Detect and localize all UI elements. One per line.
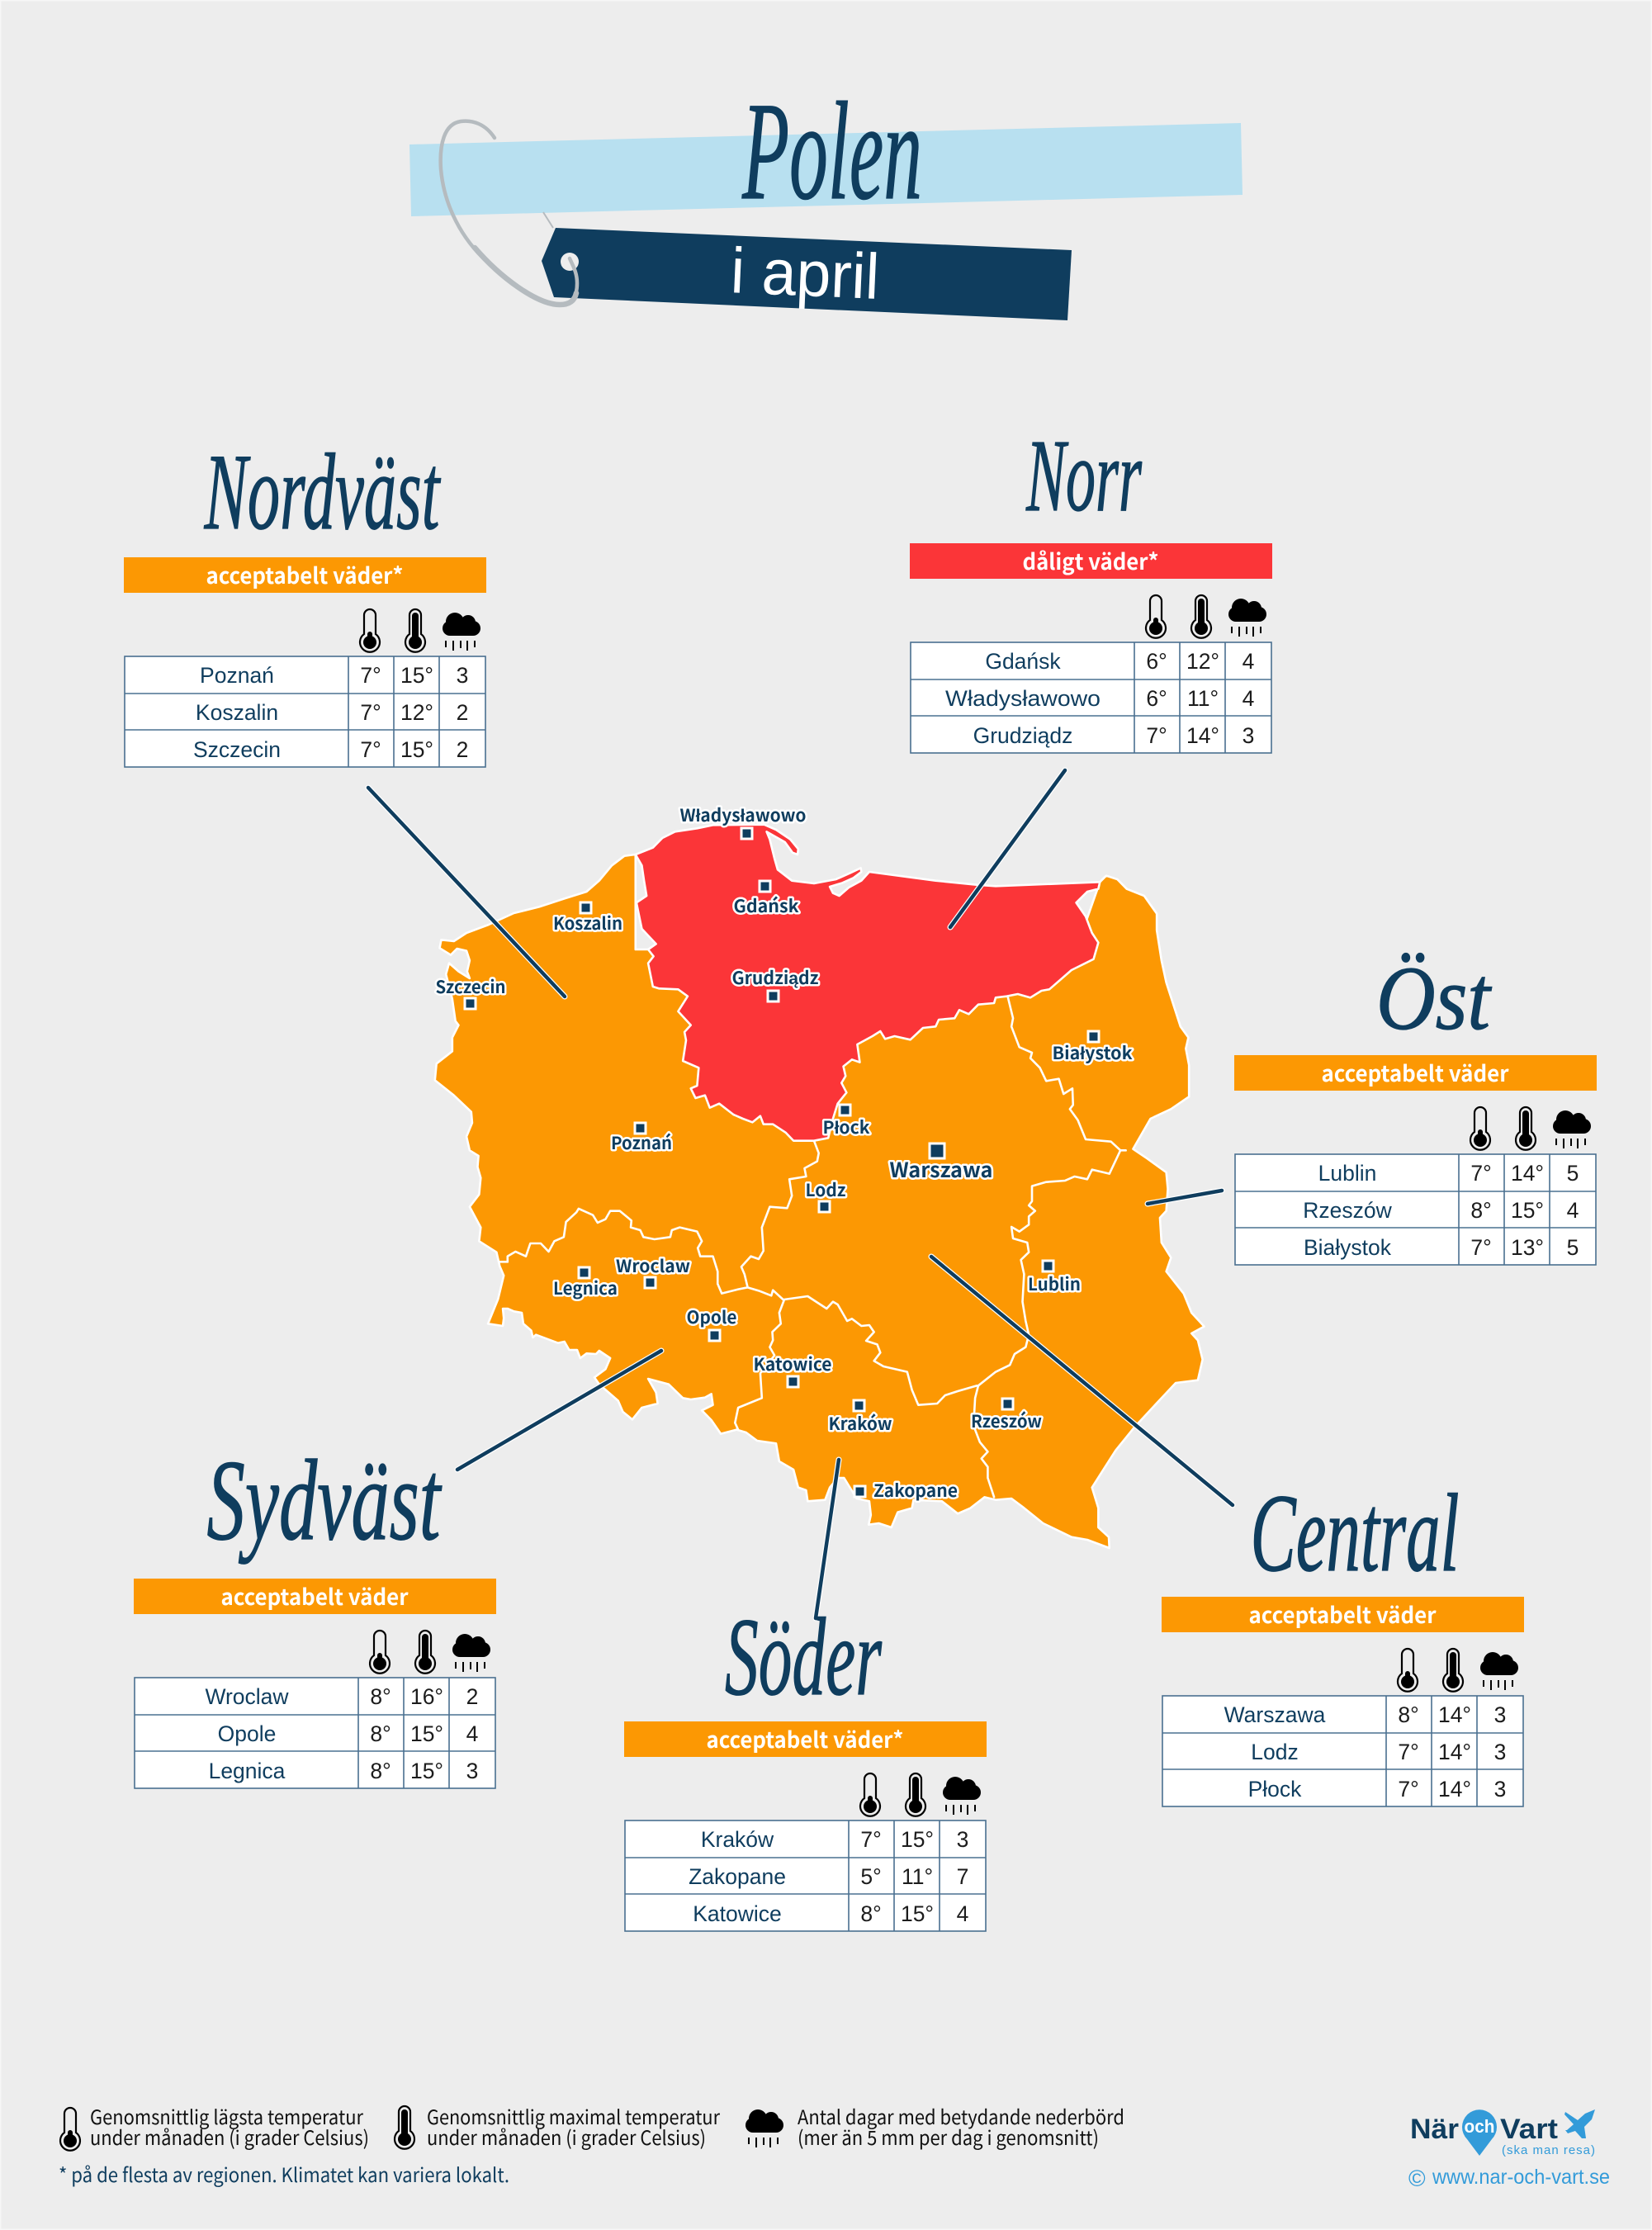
city labels: Grudziądz (731, 965, 819, 990)
panel: Norr (910, 419, 1272, 753)
panel: Sydväst (134, 1437, 496, 1788)
footnote: * på de flesta av regionen. Klimatet kan variera lokalt. (59, 2159, 509, 2188)
table (625, 1820, 986, 1931)
status bar: acceptabelt väder (1321, 1056, 1509, 1088)
table: 7° (1146, 723, 1167, 748)
logo: När (1410, 2114, 1459, 2145)
logo: (ska man resa) (1502, 2143, 1595, 2157)
table: Warszawa (1224, 1702, 1326, 1727)
heading: Öst: Öst (1376, 948, 1492, 1049)
status bar: acceptabelt väder (221, 1579, 409, 1612)
table: Płock (1248, 1777, 1302, 1802)
table: 12° (400, 700, 433, 725)
city labels: Katowice (753, 1352, 832, 1376)
table: Gdańsk (985, 649, 1061, 674)
table: Lublin (1318, 1161, 1376, 1186)
table: 3 (466, 1759, 478, 1783)
table: 7° (360, 737, 381, 762)
logo: www.nar-och-vart.se (1432, 2166, 1610, 2189)
table: 15° (410, 1759, 443, 1783)
table: Władysławowo (945, 686, 1101, 711)
table: 8° (1470, 1198, 1492, 1223)
subtitle text: i april (729, 234, 881, 313)
icon: airplane (1564, 2109, 1595, 2138)
table: Kraków (701, 1827, 774, 1852)
map of Poland (435, 803, 1205, 1548)
table: 4 (1243, 649, 1254, 674)
status bar (134, 1579, 496, 1614)
legend: minimum temperature (60, 2101, 369, 2151)
table: 15° (410, 1721, 443, 1746)
legend: minimum temperature: Genomsnittlig lägsta temperatur (90, 2101, 364, 2130)
region borders (499, 997, 1126, 1497)
city labels: Poznań (611, 1130, 672, 1155)
legend: rain days (746, 2101, 1124, 2151)
table: 4 (1243, 686, 1254, 711)
table: 14° (1438, 1740, 1471, 1764)
city labels: Legnica (553, 1276, 618, 1300)
city labels: Płock (822, 1115, 870, 1139)
city labels: Koszalin (553, 911, 622, 935)
table (125, 656, 485, 767)
icon: map pin (1462, 2109, 1497, 2156)
heading: Central: Central (1250, 1472, 1460, 1595)
table: 3 (1494, 1702, 1506, 1727)
table: 14° (1438, 1777, 1471, 1802)
icons (860, 1773, 981, 1816)
table: 7 (957, 1864, 968, 1889)
legend: rain days: Antal dagar med betydande nederbörd (798, 2101, 1124, 2130)
table: 3 (457, 663, 468, 688)
table: 8° (1398, 1702, 1419, 1727)
table: Wroclaw (205, 1684, 289, 1709)
table: Szczecin (193, 737, 281, 762)
subtitle tag (542, 228, 1072, 320)
table: 6° (1146, 649, 1167, 674)
city labels: Władysławowo (680, 803, 806, 827)
table: 4 (466, 1721, 478, 1746)
status bar (910, 543, 1272, 579)
table: Zakopane (689, 1864, 786, 1889)
panel: Söder (624, 1596, 987, 1931)
table: 8° (370, 1759, 391, 1783)
panel: Central (1162, 1472, 1524, 1806)
table: 3 (1494, 1740, 1506, 1764)
table: 13° (1511, 1235, 1544, 1260)
panel: Nordväst (124, 431, 486, 767)
legend (60, 2101, 1124, 2151)
status bar: dåligt väder* (1022, 544, 1159, 576)
table: 6° (1146, 686, 1167, 711)
table: 3 (957, 1827, 968, 1852)
table: Opole (218, 1721, 276, 1746)
heading: Söder: Söder (725, 1596, 882, 1719)
title: Polen: Polen (741, 73, 922, 229)
table (911, 642, 1271, 753)
tag string loop (441, 121, 577, 305)
table: 5 (1567, 1161, 1579, 1186)
icons (370, 1631, 490, 1674)
logo: © (1408, 2166, 1426, 2191)
table: 4 (957, 1901, 968, 1926)
logo: Vart (1500, 2114, 1558, 2145)
legend: maximum temperature (395, 2101, 721, 2151)
table (1235, 1154, 1596, 1265)
table (1162, 1696, 1523, 1806)
city labels: Warszawa (890, 1154, 992, 1184)
table: 8° (370, 1721, 391, 1746)
leader lines (368, 770, 1233, 1618)
table: 3 (1243, 723, 1254, 748)
table: 7° (1398, 1777, 1419, 1802)
table: 4 (1567, 1198, 1579, 1223)
table: 15° (400, 663, 433, 688)
table: Legnica (209, 1759, 286, 1783)
city labels: Opole (687, 1304, 736, 1329)
legend: maximum temperature: Genomsnittlig maximal temperatur (427, 2101, 721, 2130)
country outline: orange regions (435, 855, 1205, 1548)
region: Norr (red) (636, 825, 1100, 1141)
table: 7° (860, 1827, 882, 1852)
city labels: Zakopane (873, 1478, 958, 1503)
table: Lodz (1251, 1740, 1299, 1764)
table: 2 (457, 737, 468, 762)
city labels: Gdańsk (733, 893, 799, 918)
title band (409, 73, 1243, 229)
icons (1398, 1649, 1518, 1692)
icons (360, 609, 480, 652)
city labels: Lublin (1028, 1271, 1081, 1296)
heading: Nordväst: Nordväst (204, 431, 441, 552)
table: 15° (1511, 1198, 1544, 1223)
table (135, 1678, 495, 1788)
status bar (624, 1721, 987, 1757)
heading: Sydväst: Sydväst (206, 1437, 443, 1565)
table: Grudziądz (973, 723, 1072, 748)
table: 15° (400, 737, 433, 762)
table: 8° (370, 1684, 391, 1709)
table: 2 (457, 700, 468, 725)
city labels: Lodz (806, 1177, 846, 1202)
legend: rain days: (mer än 5 mm per dag i genomsnitt) (798, 2122, 1099, 2151)
table: 7° (360, 700, 381, 725)
city markers (465, 828, 1099, 1497)
status bar (124, 557, 486, 593)
table: Poznań (200, 663, 274, 688)
icons (1470, 1107, 1591, 1150)
table: 14° (1186, 723, 1219, 748)
table: 7° (360, 663, 381, 688)
table: 14° (1438, 1702, 1471, 1727)
logo: och (1465, 2116, 1494, 2137)
table: 15° (901, 1827, 934, 1852)
table: 11° (1187, 686, 1219, 711)
table: 5 (1567, 1235, 1579, 1260)
table: Katowice (693, 1901, 782, 1926)
heading: Norr: Norr (1025, 419, 1143, 533)
status bar (1234, 1055, 1597, 1091)
city labels: Białystok (1052, 1040, 1133, 1065)
table: 11° (902, 1864, 933, 1889)
table: 5° (860, 1864, 882, 1889)
table: 7° (1398, 1740, 1419, 1764)
status bar: acceptabelt väder (1248, 1598, 1437, 1630)
status bar (1162, 1597, 1524, 1632)
table: 2 (466, 1684, 478, 1709)
table: Białystok (1304, 1235, 1392, 1260)
table: 3 (1494, 1777, 1506, 1802)
city labels: Szczecin (436, 974, 505, 999)
icons (1146, 595, 1266, 638)
logo (1408, 2109, 1610, 2191)
table: 7° (1470, 1235, 1492, 1260)
table: 8° (860, 1901, 882, 1926)
status bar: acceptabelt väder* (707, 1722, 903, 1754)
table: Rzeszów (1303, 1198, 1393, 1223)
city labels: Wroclaw (616, 1253, 690, 1278)
city labels: Rzeszów (971, 1409, 1042, 1433)
table: 15° (901, 1901, 934, 1926)
city labels (436, 803, 1133, 1503)
legend: minimum temperature: under månaden (i grader Celsius) (90, 2122, 369, 2151)
table: 12° (1186, 649, 1219, 674)
city labels: Kraków (829, 1411, 892, 1436)
legend: maximum temperature: under månaden (i grader Celsius) (427, 2122, 706, 2151)
table: 16° (410, 1684, 443, 1709)
table: 14° (1511, 1161, 1544, 1186)
panel: Öst (1234, 948, 1597, 1265)
table: Koszalin (196, 700, 278, 725)
status bar: acceptabelt väder* (206, 558, 403, 590)
table: 7° (1470, 1161, 1492, 1186)
